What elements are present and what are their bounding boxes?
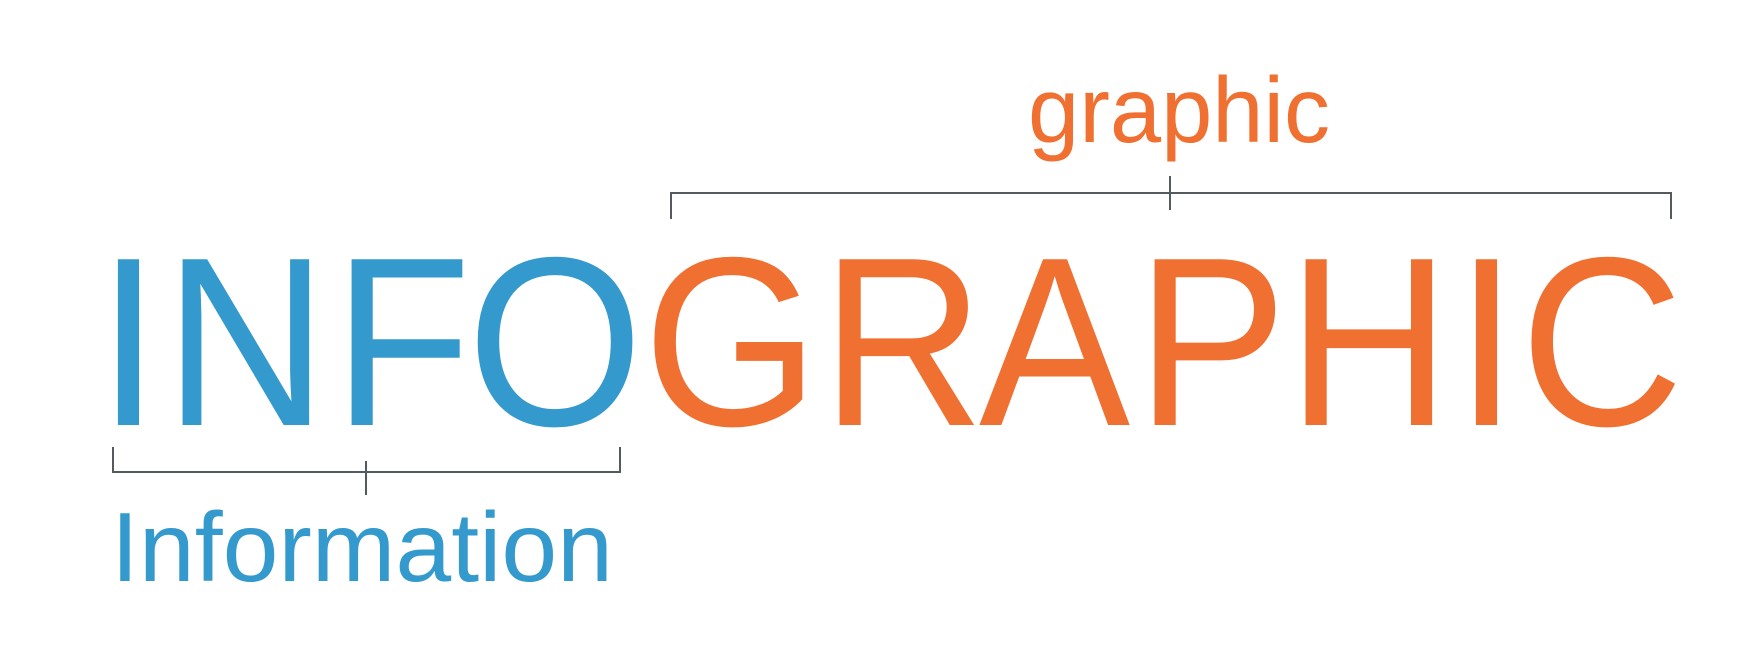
title word: INFOGRAPHIC	[97, 207, 1684, 477]
GRAPHIC part: C	[1520, 207, 1684, 477]
INFO part: I	[97, 207, 160, 477]
bracket: graphic	[671, 176, 1671, 219]
GRAPHIC part: G	[643, 207, 819, 477]
GRAPHIC part: P	[1136, 207, 1287, 477]
GRAPHIC part: R	[821, 207, 985, 477]
INFO part: O	[467, 207, 643, 477]
INFO part: N	[164, 207, 328, 477]
GRAPHIC part: H	[1287, 207, 1451, 477]
INFO part: F	[333, 207, 471, 477]
GRAPHIC part	[643, 207, 1684, 477]
label: graphic: graphic	[1028, 58, 1330, 162]
label: Information: Information	[111, 492, 613, 602]
bracket: information	[113, 447, 620, 495]
GRAPHIC part: I	[1455, 207, 1518, 477]
INFO part	[97, 207, 643, 477]
GRAPHIC part: A	[979, 207, 1130, 477]
